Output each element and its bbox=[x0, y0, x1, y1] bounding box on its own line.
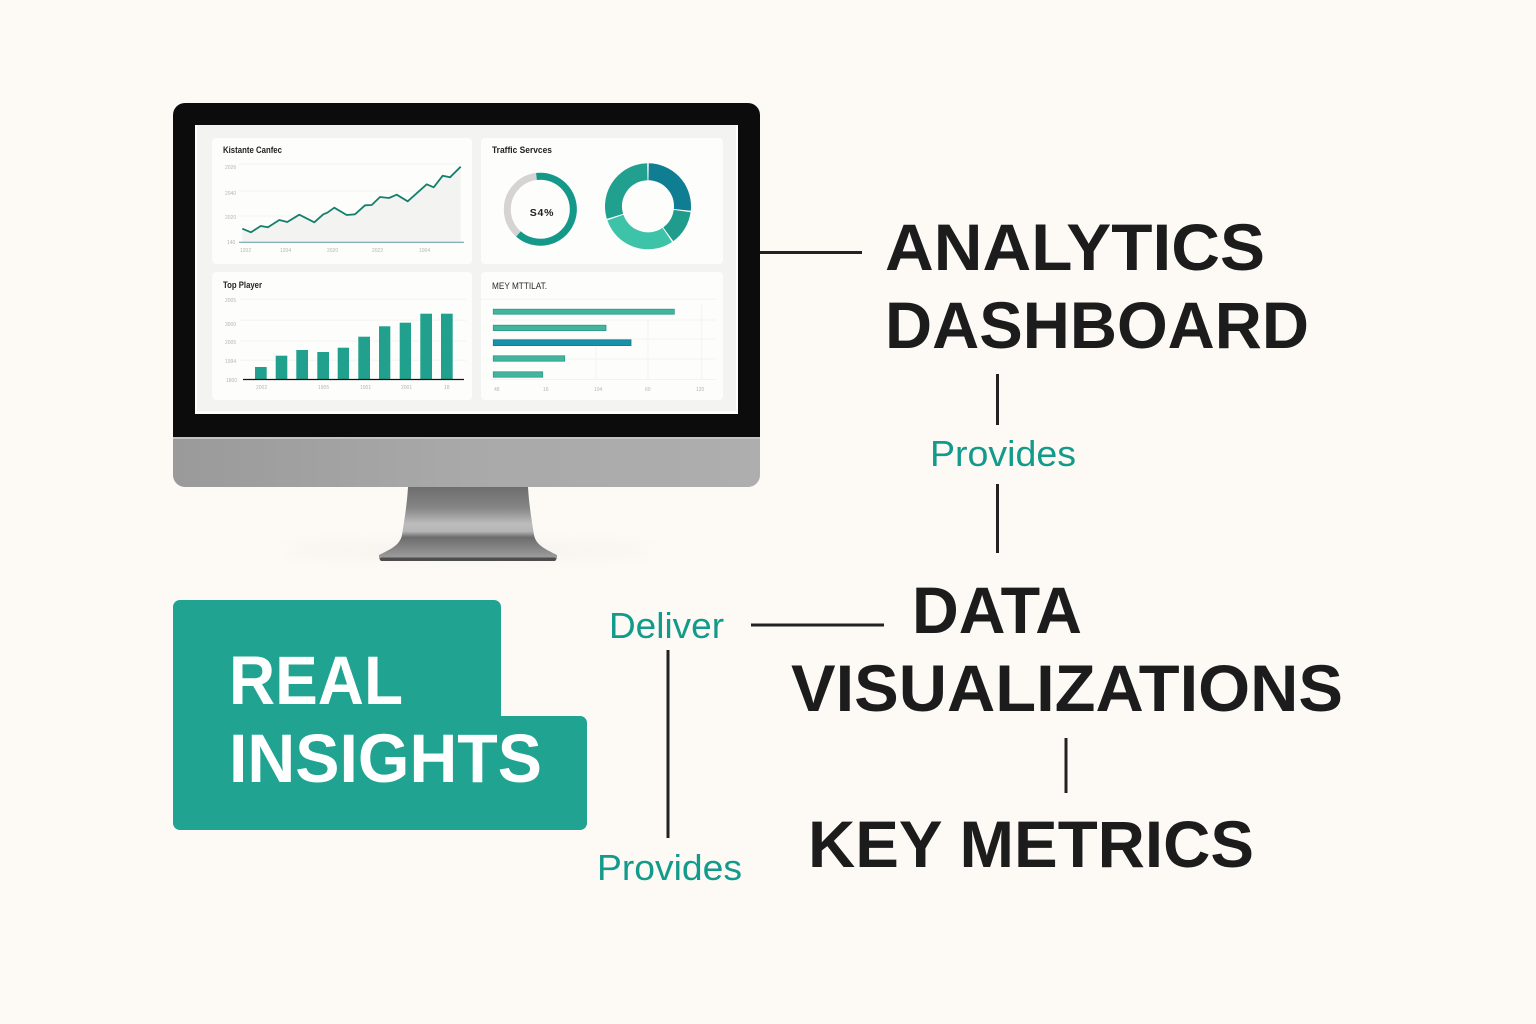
axis labels: 3000 bbox=[225, 322, 236, 328]
stand shadow bbox=[278, 544, 658, 556]
axis labels: 2020 bbox=[225, 215, 236, 221]
axis labels: 1994 bbox=[225, 359, 236, 365]
progress donut bbox=[507, 176, 573, 242]
heading: analytics dashboard bbox=[885, 210, 1309, 362]
connector: monitor to analytics dashboard bbox=[760, 251, 862, 254]
axis labels: 2005 bbox=[225, 298, 236, 304]
heading: data visualizations: DATA bbox=[912, 573, 1082, 647]
axis labels: 2001 bbox=[401, 385, 412, 391]
monitor illustration bbox=[173, 103, 760, 561]
axis labels bbox=[225, 165, 430, 254]
progress donut: S4% bbox=[530, 207, 554, 219]
real insights text: INSIGHTS bbox=[229, 720, 542, 797]
real insights text bbox=[229, 642, 542, 797]
axis labels: 2005 bbox=[225, 340, 236, 346]
axis labels: 18 bbox=[444, 385, 450, 391]
connector: deliver to data visualizations bbox=[751, 624, 884, 626]
connector: provides to data visualizations bbox=[996, 484, 999, 553]
horizontal bars bbox=[493, 309, 674, 377]
label: provides: Provides bbox=[930, 433, 1076, 474]
chart title: Traffic Servces bbox=[492, 145, 552, 155]
panel: horizontal bar chart bbox=[481, 272, 723, 400]
real insights text: REAL bbox=[229, 642, 403, 719]
axis labels: 140 bbox=[227, 240, 236, 246]
heading: data visualizations bbox=[791, 573, 1343, 725]
axis labels: 1004 bbox=[419, 248, 430, 254]
axis labels: 1204 bbox=[280, 248, 291, 254]
axis labels: 2020 bbox=[327, 248, 338, 254]
segmented donut bbox=[600, 158, 696, 254]
screen bbox=[195, 125, 738, 414]
connector: visualizations to key metrics bbox=[1064, 738, 1068, 793]
chart title: Top Player bbox=[223, 280, 262, 290]
label: deliver: Deliver bbox=[609, 605, 724, 646]
monitor stand bbox=[379, 487, 557, 561]
panel: real insights bbox=[173, 600, 587, 830]
axis labels: 104 bbox=[594, 387, 603, 393]
axis labels: 2022 bbox=[372, 248, 383, 254]
axis labels: 120 bbox=[696, 387, 705, 393]
axis labels: 1905 bbox=[318, 385, 329, 391]
bars bbox=[255, 314, 453, 379]
axis labels: 2002 bbox=[256, 385, 267, 391]
connector: deliver to provides bbox=[666, 650, 670, 838]
axis labels: 1001 bbox=[360, 385, 371, 391]
heading: analytics dashboard: DASHBOARD bbox=[885, 288, 1309, 362]
axis labels: 60 bbox=[645, 387, 651, 393]
axis labels bbox=[494, 387, 705, 393]
monitor body bbox=[173, 103, 760, 487]
axis labels: 48 bbox=[494, 387, 500, 393]
axis labels: 2040 bbox=[225, 191, 236, 197]
label: provides lower: Provides bbox=[597, 847, 742, 888]
heading: key metrics: KEY METRICS bbox=[808, 807, 1254, 881]
panel: line chart bbox=[212, 138, 472, 264]
axis labels: 1800 bbox=[226, 378, 237, 384]
heading: data visualizations: VISUALIZATIONS bbox=[791, 651, 1343, 725]
chart title: Kistante Canfec bbox=[223, 145, 282, 155]
connector: dashboard to provides bbox=[996, 374, 999, 425]
panel: bar chart bbox=[212, 272, 472, 400]
axis labels: 16 bbox=[543, 387, 549, 393]
axis labels: 1202 bbox=[240, 248, 251, 254]
panel: donut charts bbox=[481, 138, 723, 264]
line series bbox=[242, 167, 461, 242]
axis labels: 2026 bbox=[225, 165, 236, 171]
chart title: MEY MTTILAT. bbox=[492, 281, 547, 291]
axis labels bbox=[225, 298, 450, 391]
heading: analytics dashboard: ANALYTICS bbox=[885, 210, 1265, 284]
